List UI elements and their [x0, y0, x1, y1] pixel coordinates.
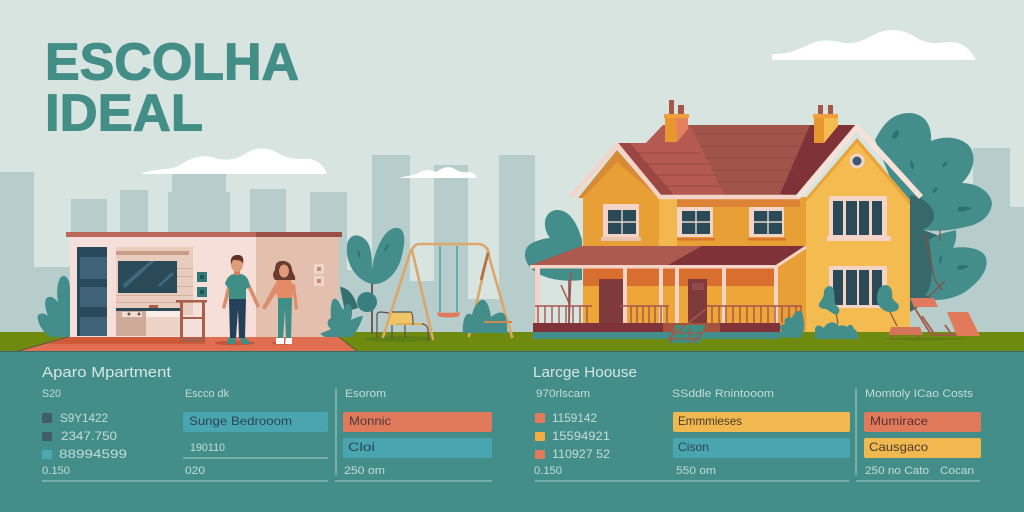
footer values: 0.150 [42, 465, 70, 477]
plaza [18, 336, 357, 351]
right wing wall [806, 138, 910, 332]
doors [599, 279, 707, 323]
value: bedroom: 190110 [190, 442, 225, 454]
lower right window [829, 266, 887, 308]
bar: monthly [343, 412, 492, 432]
railing [535, 306, 802, 323]
column labels [536, 388, 974, 400]
upper middle window [677, 207, 715, 240]
heading: large house: Larcge Hoouse [533, 364, 637, 381]
upper far window [748, 207, 786, 240]
porch columns [535, 268, 778, 323]
bush: left of building [38, 276, 70, 337]
TV [118, 261, 177, 293]
garden furniture [885, 298, 980, 340]
legend list: 15594921 [552, 431, 610, 443]
footer values: 020 [185, 465, 205, 477]
bar: expenses: Emmmieses [678, 414, 742, 428]
tree: behind house left [525, 210, 582, 323]
footer values: 0.150 [534, 465, 562, 477]
bar: utilities [864, 438, 981, 458]
cloud: small [399, 167, 477, 178]
round window [850, 154, 864, 168]
legend list: 2347.750 [61, 431, 117, 443]
large house [530, 100, 921, 343]
bar: bedroom: Sunge Bedrooom [189, 414, 292, 428]
legend list: 88994599 [59, 449, 127, 461]
apartment building [18, 232, 357, 351]
swing set [364, 244, 512, 342]
tree: behind house right [875, 113, 992, 312]
bar: mortgage [864, 412, 981, 432]
bush: behind swing [463, 300, 508, 333]
right chimney [813, 105, 838, 143]
legend list [42, 413, 127, 461]
wall icons [197, 264, 324, 297]
bush: right [815, 322, 858, 339]
small tree: right b [877, 285, 899, 326]
center wall [659, 197, 806, 323]
main roof [617, 125, 857, 197]
column labels: S20 [42, 388, 61, 400]
bush: porch right [772, 311, 804, 338]
footer values: Cocan [940, 465, 974, 477]
footer values [42, 465, 385, 477]
footer values: 250 om [344, 465, 385, 477]
footer values [534, 465, 974, 477]
door [77, 247, 107, 336]
footer values: 550 om [676, 465, 716, 477]
title: ESCOLHA [45, 34, 299, 92]
porch walls [583, 250, 806, 332]
upper left window [601, 204, 641, 241]
bar: cost [343, 438, 492, 458]
bar: bedroom [183, 412, 328, 432]
footer values: 250 no Cato [865, 465, 929, 477]
legend list: 110927 52 [552, 449, 610, 461]
bar: utilities: Causgaco [869, 440, 928, 454]
column labels [42, 388, 386, 400]
right wing trim [798, 127, 921, 197]
left chimney [664, 100, 689, 142]
kitchen wall [116, 247, 193, 336]
title [45, 34, 299, 142]
woman [262, 261, 298, 345]
column labels: Escco dk [185, 388, 229, 400]
legend list [535, 413, 610, 461]
title: IDEAL [45, 84, 203, 142]
cloud: top right [772, 30, 976, 60]
column labels: Esorom [345, 388, 386, 400]
bar: mortgage: Mumirace [870, 414, 928, 428]
bar: cost [673, 438, 850, 458]
panel: large house [533, 364, 981, 481]
skyline background [0, 148, 1024, 340]
bar: cost: Cloi [348, 440, 375, 454]
garden tree [340, 228, 404, 334]
walls [70, 237, 256, 337]
info panel [0, 351, 1024, 512]
column labels: Momtoly ICao Costs [865, 388, 974, 400]
bush: right of building [320, 298, 363, 337]
cloud: left [140, 148, 327, 174]
roof [66, 232, 256, 237]
bar: expenses [673, 412, 850, 432]
gable trim [571, 145, 800, 197]
legend list: 1159142 [552, 413, 597, 425]
trunk in front of porch [568, 280, 570, 323]
panel: apartment [42, 364, 492, 481]
bar: cost: Cison [678, 440, 709, 454]
heading: apartment: Aparo Mpartment [42, 364, 172, 381]
shelf [176, 300, 207, 342]
left gable wall [583, 152, 659, 323]
porch roof [530, 246, 806, 268]
ground [0, 332, 1024, 351]
upper right window [827, 196, 891, 241]
porch base [533, 323, 780, 339]
column labels: SSddle Rnintooom [672, 388, 774, 400]
small tree: right a [819, 286, 839, 324]
bar: monthly: Monnic [349, 414, 391, 428]
steps [668, 309, 709, 343]
man [215, 255, 260, 346]
legend list: S9Y1422 [60, 413, 108, 425]
column labels: 970rlscam [536, 388, 590, 400]
